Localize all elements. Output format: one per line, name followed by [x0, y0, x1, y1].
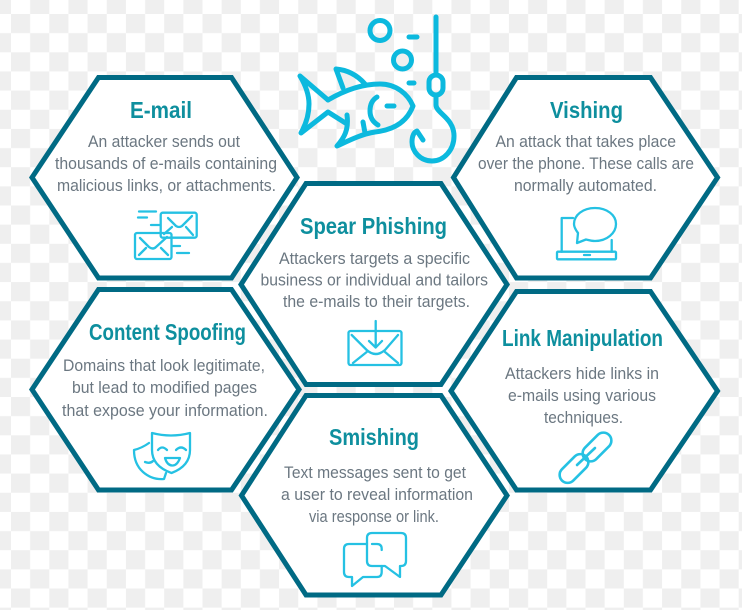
heading: Spear Phishing: Spear Phishing — [300, 213, 447, 239]
text: Link Manipulation description: e-mails using various — [508, 386, 656, 405]
icon: laptop with speech bubble — [557, 208, 616, 259]
text: E-mail description: malicious links, or attachments. — [57, 176, 276, 195]
text: Link Manipulation description: techniques. — [544, 408, 623, 427]
text: Content Spoofing description: that expose your information. — [62, 401, 268, 420]
panel: Smishing — [242, 396, 507, 595]
text: Spear Phishing description: business or individual and tailors — [260, 270, 488, 290]
text: Smishing description: a user to reveal information — [281, 485, 473, 504]
heading: Link Manipulation: Link Manipulation — [502, 325, 663, 351]
text: Content Spoofing description: Domains that look legitimate, — [63, 356, 265, 375]
text: Vishing description — [478, 132, 694, 195]
text: Content Spoofing description — [62, 356, 268, 420]
text: E-mail description: An attacker sends out — [88, 132, 240, 151]
icon: theatre masks — [134, 433, 190, 479]
text: Smishing description: Text messages sent to get — [284, 463, 466, 482]
text: Vishing description: An attack that takes place — [496, 132, 676, 151]
text: Vishing description: over the phone. These calls are — [478, 154, 694, 173]
icon: envelopes — [135, 212, 197, 259]
icon: envelope with arrow — [348, 321, 402, 365]
icon: chat bubbles — [344, 533, 406, 586]
text: Smishing description: via response or link. — [309, 507, 439, 526]
text: E-mail description — [55, 132, 277, 195]
text: Link Manipulation description — [505, 364, 659, 427]
text: E-mail description: thousands of e-mails containing — [55, 154, 277, 173]
panel: Content Spoofing — [32, 290, 299, 490]
heading: Content Spoofing: Content Spoofing — [89, 319, 246, 345]
text: Vishing description: normally automated. — [514, 176, 657, 195]
text: Link Manipulation description: Attackers hide links in — [505, 364, 659, 383]
heading: E-mail: E-mail — [130, 97, 192, 123]
heading: Smishing: Smishing — [329, 424, 419, 450]
text: Smishing description — [281, 463, 473, 526]
icon: fish and hook — [300, 17, 454, 161]
text: Content Spoofing description: but lead to modified pages — [72, 378, 257, 397]
text: Spear Phishing description: the e-mails to their targets. — [283, 292, 470, 311]
panel: Vishing — [454, 78, 718, 278]
panel: Spear Phishing — [241, 184, 507, 384]
panel: E-mail — [32, 78, 297, 278]
text: Spear Phishing description — [260, 249, 488, 311]
panel: Link Manipulation — [451, 292, 718, 490]
icon: chain link — [556, 429, 615, 486]
text: Spear Phishing description: Attackers targets a specific — [279, 249, 470, 268]
heading: Vishing: Vishing — [550, 97, 623, 123]
